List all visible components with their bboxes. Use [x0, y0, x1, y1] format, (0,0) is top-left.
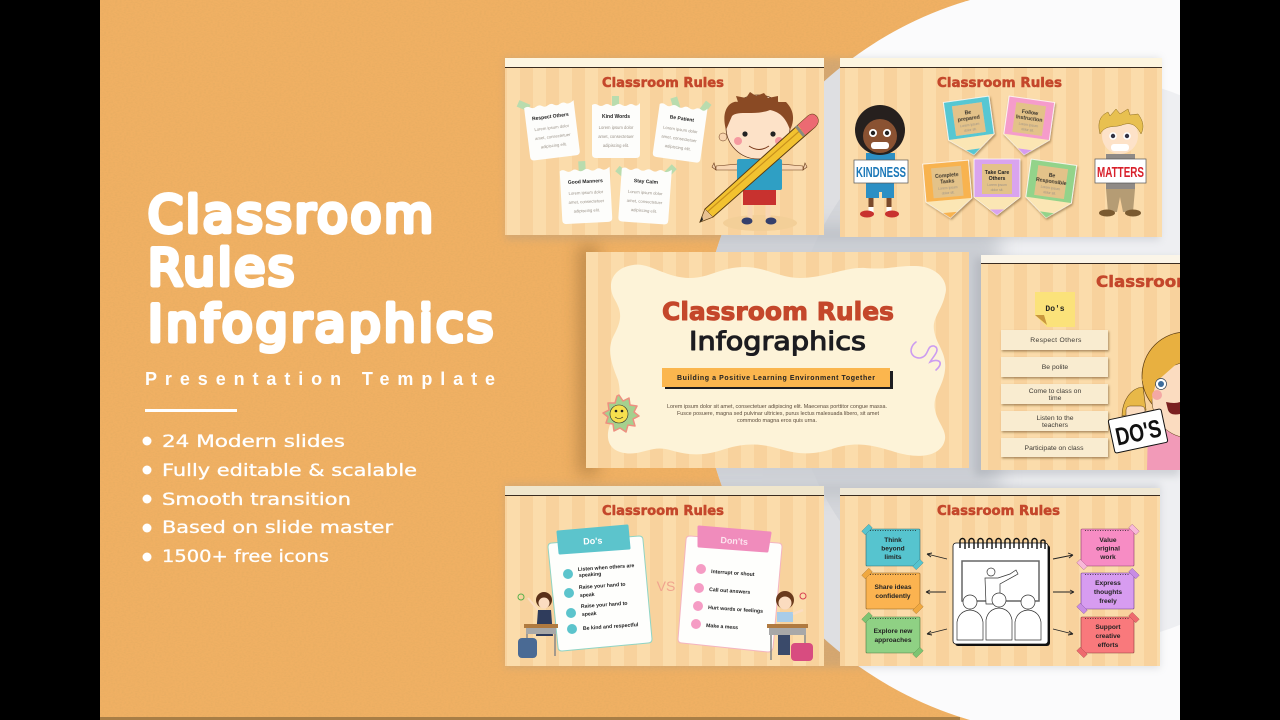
- box: Explore new approaches: Explore new: [874, 628, 913, 635]
- left text column: [142, 186, 495, 566]
- box: Express thoughts freely: Express: [1095, 580, 1121, 587]
- note: Be Patient: adipiscing elit.: [664, 143, 691, 152]
- subtitle: Presentation Template: [145, 369, 495, 389]
- slide 3: center cover slide: [586, 252, 969, 468]
- box: Value original work: work: [1099, 554, 1116, 561]
- card: Take Care Others: [974, 159, 1020, 215]
- list row text: time: [1049, 395, 1062, 402]
- background: white circle: [716, 0, 1180, 720]
- note: Respect Others: [516, 94, 580, 162]
- note: Stay Calm: amet, consectetuer: [627, 198, 663, 205]
- Do's card: Listen when others are: [578, 563, 635, 573]
- note: Stay Calm: Lorem ipsum dolor: [628, 189, 663, 196]
- box: Support creative efforts: [1077, 612, 1139, 658]
- card: Be prepared: prepared: [957, 115, 980, 124]
- Don'ts card: Don'ts: [720, 535, 748, 547]
- slide 2: pencil cards and kids: [840, 58, 1162, 237]
- card: Complete Tasks: Complete: [935, 172, 959, 180]
- box: Value original work: original: [1096, 546, 1120, 552]
- card: Follow Instruction: Instruction: [1015, 114, 1043, 124]
- note: Kind Words: [592, 96, 640, 158]
- box: Explore new approaches: approaches: [874, 637, 912, 644]
- cream blob: [608, 265, 946, 456]
- card: Take Care Others: dolor sit.: [991, 188, 1003, 192]
- Don'ts card: [678, 527, 782, 652]
- Do's card: Raise your hand to: [581, 601, 628, 610]
- divider line: [145, 409, 237, 412]
- Do's card: Raise your hand to: [579, 582, 626, 591]
- card: Be prepared: [943, 96, 997, 158]
- lorem paragraph: [667, 404, 887, 424]
- kid holding MATTERS sign: MATTERS: [1097, 164, 1144, 181]
- card: Follow Instruction: Lorem ipsum: [1018, 122, 1038, 128]
- card: Be Responsible: Responsible: [1035, 177, 1067, 187]
- card: Take Care Others: Lorem ipsum: [987, 183, 1007, 187]
- note: Be Patient: Lorem ipsum dolor: [663, 125, 698, 134]
- feature list: Smooth transition: [162, 490, 351, 509]
- kid holding KINDNESS sign: KINDNESS: [856, 164, 906, 181]
- main title: [148, 186, 493, 353]
- Do's card: speak: [582, 611, 597, 618]
- VS label: VS: [657, 578, 675, 594]
- note: Good Manners: adipiscing elit.: [574, 207, 600, 214]
- note: Good Manners: Lorem ipsum dolor: [568, 189, 604, 196]
- note: Stay Calm: Stay Calm: [634, 178, 659, 186]
- slide 1 title: Classroom Rules: [602, 76, 724, 91]
- main title: Infographics: [148, 295, 493, 353]
- card: Be prepared: Lorem ipsum: [960, 122, 980, 128]
- card: Follow Instruction: [1001, 96, 1055, 158]
- icon: purple squiggle: [911, 342, 940, 370]
- slide 6: notebook and sticky boxes: [840, 488, 1160, 666]
- slide 5 title: Classroom Rules: [602, 504, 724, 519]
- Don'ts card: Make a mess: [706, 623, 738, 631]
- note: Kind Words: Lorem ipsum dolor: [599, 125, 634, 130]
- Don'ts card: Interrupt or shout: [711, 569, 755, 578]
- note: Be Patient: amet, consectetuer: [661, 133, 698, 143]
- boy with pencil: [700, 92, 818, 231]
- list row text: Respect Others: [1030, 337, 1082, 344]
- main title: Rules: [148, 239, 294, 297]
- note: Respect Others: Respect Others: [532, 112, 569, 122]
- box: Support creative efforts: efforts: [1098, 642, 1119, 649]
- tagline banner: Building a Positive Learning Environment Together: [677, 375, 875, 382]
- slide 4: Do's list, clipped at right: [981, 255, 1180, 470]
- lorem paragraph: commodo magna eros quis urna.: [737, 418, 817, 424]
- card: Be Responsible: dolor sit.: [1043, 190, 1056, 196]
- feature list: 24 Modern slides: [162, 432, 345, 451]
- card: Follow Instruction: Follow: [1021, 109, 1039, 117]
- Do's card: Be kind and respectful: [583, 622, 639, 632]
- sticky note: Do's: [1045, 305, 1065, 314]
- feature list: Fully editable & scalable: [162, 461, 417, 480]
- box: Think beyond limits: limits: [884, 554, 902, 561]
- note: Be Patient: [652, 94, 712, 164]
- note: Good Manners: amet, consectetuer: [568, 198, 605, 205]
- Do's card: Do's: [583, 536, 603, 546]
- feature list: Based on slide master: [162, 518, 393, 537]
- card: Complete Tasks: dolor sit.: [942, 190, 955, 196]
- box: Share ideas confidently: Share ideas: [874, 584, 912, 591]
- note: Respect Others: amet, consectetuer: [535, 132, 571, 141]
- feature list: 1500+ free icons: [162, 547, 329, 566]
- Don'ts card: Call out answers: [709, 587, 751, 596]
- slide 2 title: Classroom Rules: [937, 76, 1062, 91]
- girl holding DO'S sign: DO'S: [1113, 414, 1164, 451]
- list row text: teachers: [1042, 422, 1069, 429]
- box: Value original work: Value: [1099, 537, 1117, 544]
- note: Kind Words: amet, consectetuer: [598, 134, 634, 139]
- tagline banner: [662, 368, 893, 389]
- card: Be Responsible: Be: [1048, 173, 1056, 180]
- list row text: Come to class on: [1029, 388, 1081, 395]
- kid holding MATTERS sign: [1095, 109, 1146, 216]
- icon: smiley flower: [603, 395, 639, 432]
- list row text: Participate on class: [1025, 445, 1084, 452]
- box: Share ideas confidently: confidently: [875, 593, 911, 600]
- card: Be prepared: dolor sit.: [964, 127, 977, 133]
- note: Kind Words: Kind Words: [602, 114, 630, 120]
- lorem paragraph: Fusce posuere, magna sed pulvinar ultricies, purus lectus malesuada libero, sit amet: [677, 411, 879, 417]
- note: Respect Others: adipiscing elit.: [541, 141, 567, 149]
- box: Think beyond limits: Think: [884, 537, 902, 544]
- main title: Classroom: [148, 186, 433, 244]
- Do's card: speak: [580, 592, 595, 599]
- note: Be Patient: Be Patient: [669, 114, 695, 124]
- kid holding KINDNESS sign: [854, 105, 908, 218]
- lorem paragraph: Lorem ipsum dolor sit amet, consectetuer adipiscing elit. Maecenas porttitor congue massa.: [667, 404, 887, 410]
- box: Value original work: [1077, 524, 1139, 570]
- box: Express thoughts freely: [1077, 568, 1139, 614]
- slide 5: Do's vs Don'ts: [505, 486, 824, 666]
- note: Respect Others: Lorem ipsum dolor: [534, 123, 570, 132]
- note: Stay Calm: adipiscing elit.: [631, 207, 657, 214]
- cover subheading: Infographics: [689, 327, 866, 357]
- box: Think beyond limits: [862, 524, 923, 570]
- card: Complete Tasks: Lorem ipsum: [938, 185, 958, 191]
- box: Express thoughts freely: thoughts: [1094, 589, 1122, 596]
- notebook with classroom drawing: [953, 538, 1050, 646]
- slide 1: notes and boy with pencil: [505, 58, 824, 235]
- note: Stay Calm: [612, 160, 677, 225]
- slide 4 title: Classroom Rules: [1096, 272, 1251, 291]
- girl at desk with backpack: [518, 592, 558, 658]
- girl holding DO'S sign: [1108, 332, 1180, 470]
- note: Kind Words: adipiscing elit.: [603, 143, 629, 148]
- card: Complete Tasks: [923, 160, 973, 220]
- box: Express thoughts freely: freely: [1099, 598, 1117, 605]
- list rows: [1001, 330, 1108, 457]
- list row text: Be polite: [1042, 364, 1068, 371]
- Do's card: [548, 526, 652, 651]
- list row text: [1025, 337, 1084, 452]
- Don'ts card: Hurt words or feelings: [708, 605, 763, 615]
- feature list: [142, 432, 417, 566]
- box: Explore new approaches: [862, 612, 923, 658]
- note: Good Manners: [559, 160, 612, 224]
- cover heading: Classroom Rules: [662, 297, 894, 326]
- box: Think beyond limits: beyond: [881, 546, 905, 552]
- boy at desk with backpack: [767, 591, 813, 661]
- box: Share ideas confidently: [862, 568, 923, 614]
- slide 6 title: Classroom Rules: [937, 504, 1060, 519]
- box: Support creative efforts: Support: [1095, 624, 1121, 631]
- card: Follow Instruction: dolor sit.: [1021, 127, 1034, 133]
- card: Take Care Others: Take Care: [985, 170, 1009, 176]
- list row text: Listen to the: [1036, 415, 1074, 422]
- card: Be Responsible: [1023, 159, 1077, 221]
- card: Take Care Others: Others: [989, 176, 1005, 182]
- card: Complete Tasks: Tasks: [940, 178, 955, 186]
- card: Be Responsible: Lorem ipsum: [1040, 185, 1060, 191]
- slide shadows: [505, 58, 1180, 668]
- arrows: [926, 553, 1074, 635]
- box: Support creative efforts: creative: [1096, 633, 1121, 640]
- note: Good Manners: Good Manners: [568, 178, 603, 186]
- sticky note: [1035, 292, 1075, 327]
- card: Be prepared: Be: [964, 110, 972, 117]
- Do's card: speaking: [579, 571, 602, 579]
